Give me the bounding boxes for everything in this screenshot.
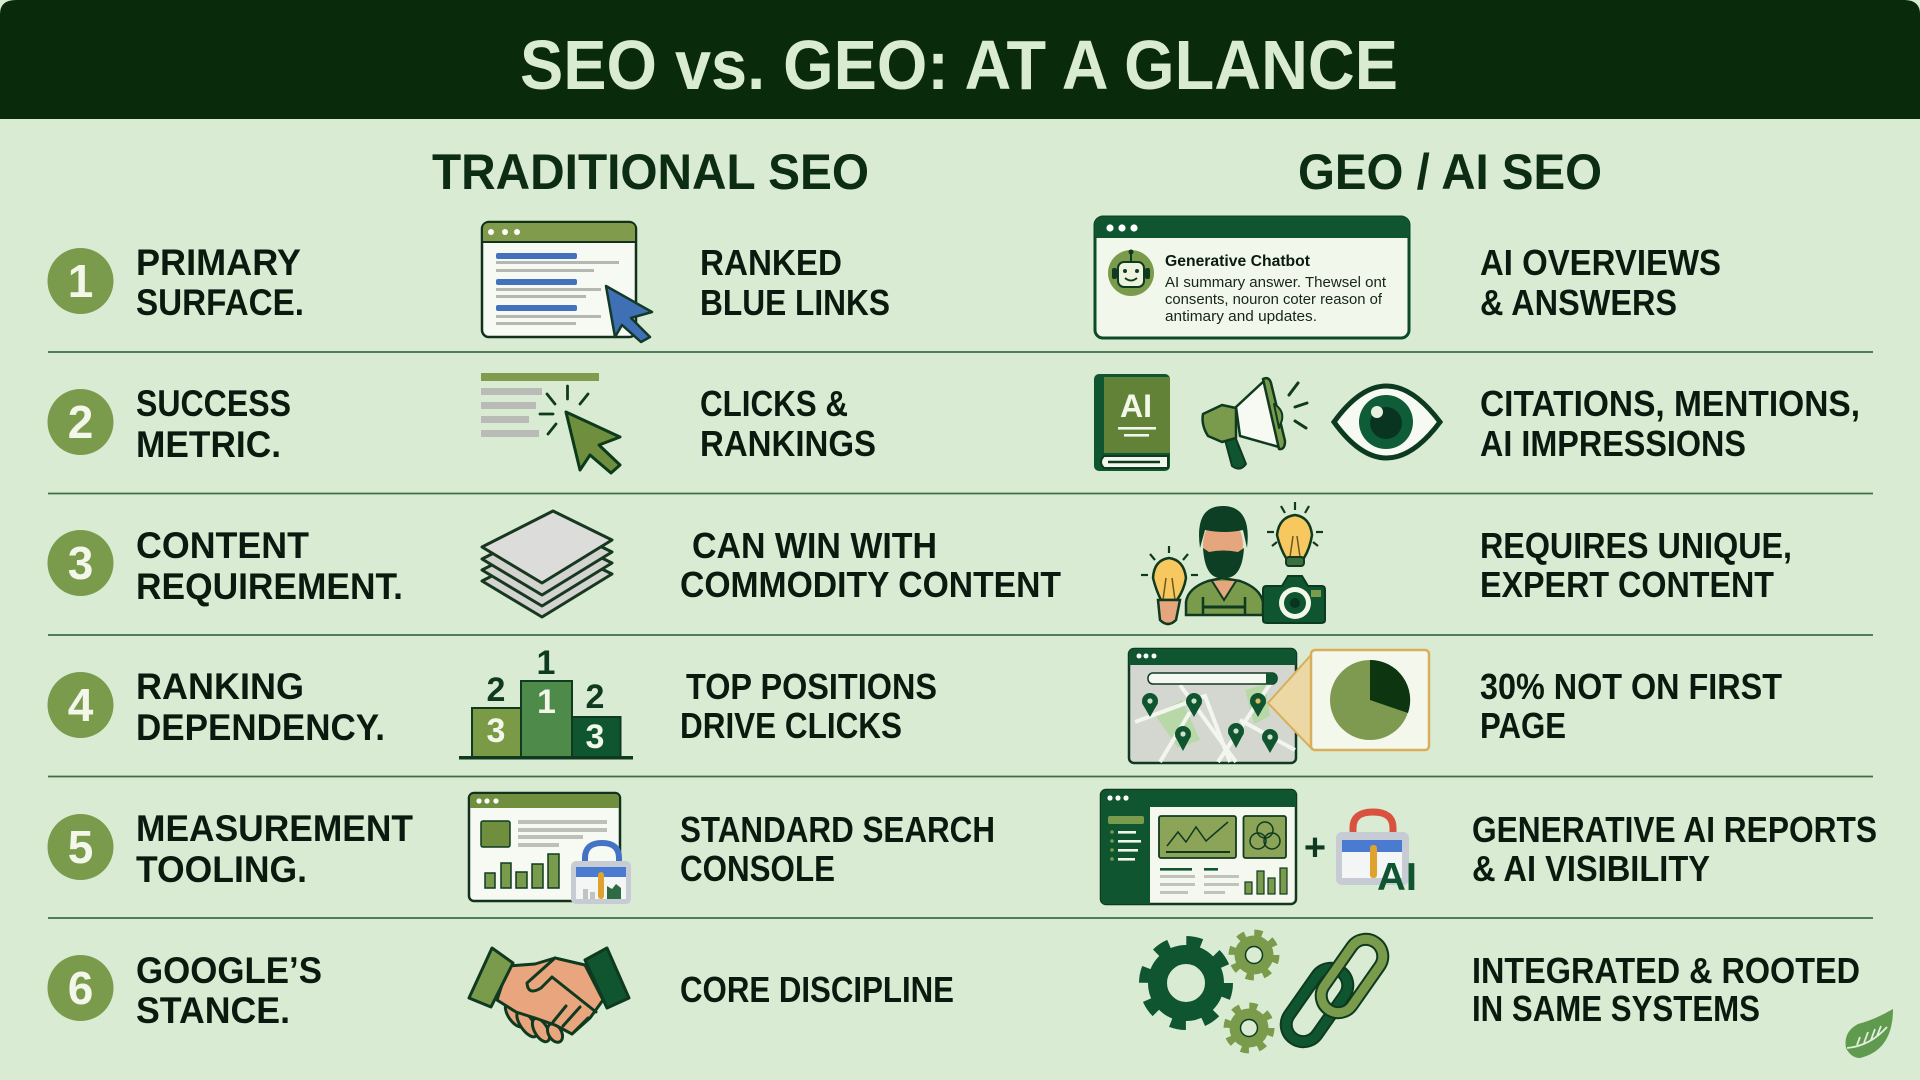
row label: measurement tooling: MEASUREMENT	[136, 808, 413, 849]
row label: content requirement: REQUIREMENT.	[136, 566, 403, 607]
icon: interlocking gears	[1145, 933, 1276, 1050]
row value: top positions drive clicks	[680, 666, 937, 746]
icon: right light bulb	[1267, 502, 1323, 566]
icon: generative AI report dashboard	[1101, 790, 1296, 904]
icon: blue padlock	[571, 843, 631, 904]
row value: thirty percent not on first page: PAGE	[1480, 705, 1566, 746]
icon: eye	[1334, 386, 1440, 458]
number badge 4	[48, 672, 114, 738]
number badge 1	[48, 248, 114, 314]
row 4: ranking dependency	[48, 644, 1782, 763]
row label: content requirement	[136, 525, 403, 607]
icon: handshake	[469, 948, 629, 1045]
row value: AI overviews and answers	[1480, 242, 1721, 323]
icon: ranking podium: 2	[487, 671, 505, 709]
row label: ranking dependency	[136, 666, 385, 748]
title: SEO vs. GEO: AT A GLANCE	[520, 26, 1398, 104]
row value: ranked blue links: BLUE LINKS	[700, 282, 890, 323]
row label: ranking dependency: RANKING	[136, 666, 304, 707]
icon: generative chatbot window	[1095, 217, 1409, 338]
icon: browser with ranked blue links and cursor	[482, 222, 652, 342]
row value: standard search console: CONSOLE	[680, 848, 835, 889]
row value: top positions drive clicks: DRIVE CLICKS	[680, 705, 902, 746]
row label: primary surface: SURFACE.	[136, 282, 304, 323]
icon: stack of identical pages	[482, 511, 612, 617]
row value: can win with commodity content	[680, 525, 1061, 605]
row value: standard search console: STANDARD SEARCH	[680, 809, 995, 850]
row label: success metric: SUCCESS	[136, 383, 291, 424]
icon: generative chatbot window: AI summary answer. Thewsel ont	[1165, 275, 1386, 291]
row value: requires unique expert content: EXPERT CONTENT	[1480, 564, 1774, 605]
number badge 1: 1	[68, 255, 93, 307]
icon: ranking podium: 2	[586, 678, 604, 716]
row label: measurement tooling	[136, 808, 413, 890]
row 6: google's stance	[48, 933, 1860, 1050]
icon: generative chatbot window: Generative Chatbot	[1165, 253, 1311, 270]
number badge 2: 2	[68, 396, 93, 448]
icon: AI book	[1094, 374, 1170, 471]
row label: success metric	[136, 383, 291, 465]
row label: primary surface: PRIMARY	[136, 242, 301, 283]
number badge 6: 6	[68, 962, 93, 1014]
row value: integrated and rooted in same systems	[1472, 950, 1860, 1029]
row value: clicks and rankings	[700, 383, 876, 464]
number badge 3: 3	[68, 537, 93, 589]
row value: AI overviews and answers: AI OVERVIEWS	[1480, 242, 1721, 283]
plus sign: +	[1304, 827, 1326, 869]
icon: AI book: AI	[1120, 388, 1152, 424]
row label: measurement tooling: TOOLING.	[136, 849, 307, 890]
column heading: GEO / AI SEO: GEO / AI SEO	[1298, 144, 1602, 200]
row value: generative AI reports and AI visibility	[1472, 809, 1877, 889]
row label: ranking dependency: DEPENDENCY.	[136, 707, 385, 748]
row label: google's stance	[136, 950, 322, 1031]
row value: integrated and rooted in same systems: IN SAME SYSTEMS	[1472, 988, 1760, 1029]
header banner	[0, 0, 1920, 119]
row value: integrated and rooted in same systems: INTEGRATED & ROOTED	[1472, 950, 1860, 991]
row value: citations mentions impressions	[1480, 383, 1860, 464]
number badge 2	[48, 389, 114, 455]
row 1: primary surface	[48, 217, 1721, 342]
number badge 4: 4	[68, 679, 94, 731]
number badge 5: 5	[68, 821, 93, 873]
row value: generative AI reports and AI visibility: GENERATIVE AI REPORTS	[1472, 809, 1877, 850]
icon: left light bulb	[1141, 546, 1198, 624]
icon: generative chatbot window: antimary and updates.	[1165, 309, 1317, 325]
row value: ranked blue links	[700, 242, 890, 323]
row 3: content requirement	[48, 502, 1792, 624]
row value: generative AI reports and AI visibility: & AI VISIBILITY	[1472, 848, 1710, 889]
icon: ranking podium: 1	[537, 683, 556, 721]
row value: requires unique expert content: REQUIRES UNIQUE,	[1480, 525, 1792, 566]
column heading: traditional SEO: TRADITIONAL SEO	[432, 144, 869, 200]
row value: core discipline: CORE DISCIPLINE	[680, 969, 954, 1010]
icon: ranking podium: 1	[537, 644, 555, 682]
row value: standard search console	[680, 809, 995, 889]
row value: thirty percent not on first page	[1480, 666, 1782, 746]
row value: can win with commodity content: COMMODITY CONTENT	[680, 564, 1061, 605]
row label: google's stance: GOOGLE’S	[136, 950, 322, 991]
icon: megaphone	[1203, 378, 1307, 469]
row 2: success metric	[48, 373, 1860, 473]
row 5: measurement tooling	[48, 790, 1877, 904]
icon: chain link	[1280, 933, 1389, 1048]
row value: ranked blue links: RANKED	[700, 242, 842, 283]
number badge 3	[48, 530, 114, 596]
icon: camera	[1263, 576, 1325, 623]
row value: clicks and rankings: CLICKS &	[700, 383, 848, 424]
row label: google's stance: STANCE.	[136, 990, 290, 1031]
icon: red padlock with AI	[1336, 812, 1417, 899]
row value: thirty percent not on first page: 30% NOT ON FIRST	[1480, 666, 1782, 707]
number badge 6	[48, 955, 114, 1021]
icon: red padlock with AI: AI	[1377, 856, 1417, 899]
row label: success metric: METRIC.	[136, 424, 281, 465]
row value: clicks and rankings: RANKINGS	[700, 423, 876, 464]
row label: primary surface	[136, 242, 304, 323]
row label: content requirement: CONTENT	[136, 525, 309, 566]
row value: citations mentions impressions: AI IMPRESSIONS	[1480, 423, 1746, 464]
icon: leaf logo	[1846, 1009, 1893, 1058]
row value: requires unique expert content	[1480, 525, 1792, 605]
row value: can win with commodity content: CAN WIN WITH	[692, 525, 937, 566]
icon: ranking podium: 3	[586, 718, 604, 756]
row value: AI overviews and answers: & ANSWERS	[1480, 282, 1677, 323]
icon: ranking podium: 3	[487, 712, 505, 750]
icon: expert with light bulbs and camera	[1141, 502, 1325, 624]
row value: citations mentions impressions: CITATIONS, MENTIONS,	[1480, 383, 1860, 424]
icon: ranking podium	[459, 644, 633, 760]
icon: search console dashboard	[469, 793, 631, 904]
icon: clicked result list	[481, 373, 620, 473]
callout: pie chart	[1268, 650, 1429, 750]
row value: top positions drive clicks: TOP POSITIONS	[686, 666, 937, 707]
icon: generative chatbot window: consents, nouron coter reason of	[1165, 292, 1383, 308]
number badge 5	[48, 814, 114, 880]
icon: search map with pins	[1129, 649, 1296, 763]
